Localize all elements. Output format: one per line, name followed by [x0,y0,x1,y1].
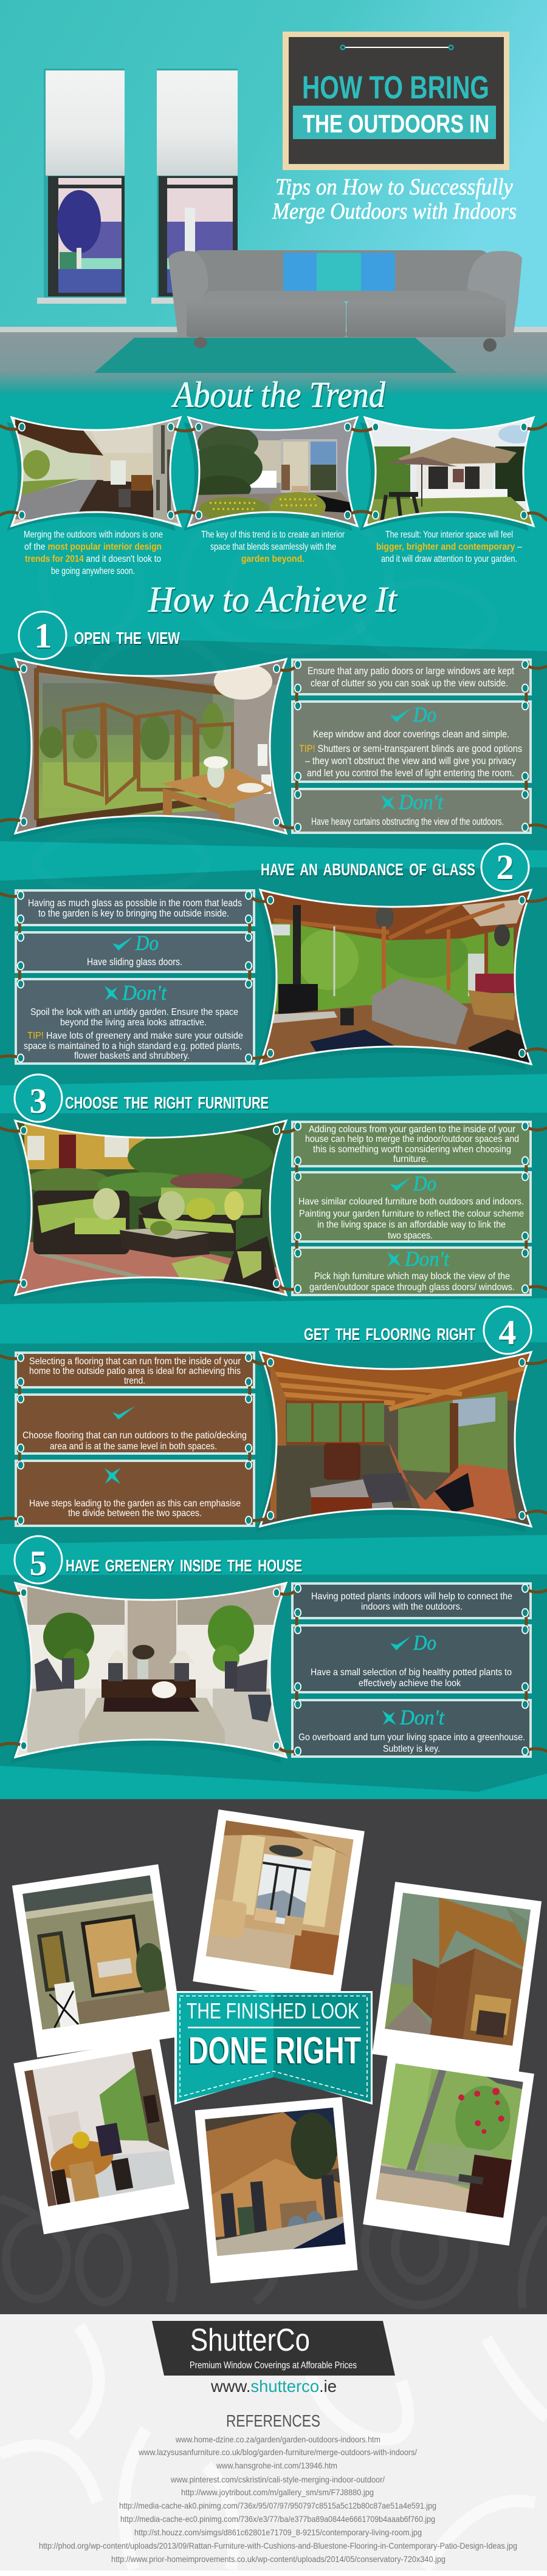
text: about column 2: space that blends seamlessly with the [210,542,336,552]
step 3 intro box: Adding colours from your garden to the inside of your [309,1124,516,1135]
step 2 dont box: beyond the living area looks attractive. [60,1017,207,1028]
step 4 do box: Choose flooring that can run outdoors to the patio/decking [22,1430,247,1441]
references list: www.home-dzine.co.za/garden/garden-outdoors-indoors.htm [175,2434,380,2444]
references list: http://media-cache-ec0.pinimg.com/736x/e3/77/ba/e377ba89a0844e6661709b4aaab6f760.jpg [120,2514,435,2524]
step 4 dont box [16,1461,254,1526]
ropes: step 5 [0,1584,547,1755]
step 2 header: 2 [496,847,514,887]
step 1 dont box [292,789,531,833]
text: about column 1 [24,530,163,576]
references list [39,2434,517,2564]
step 5 do box: Have a small selection of big healthy potted plants to [311,1667,512,1678]
step 4 do box [16,1395,254,1454]
step 4 dont box: the divide between the two spaces. [68,1508,202,1519]
references list: http://www.prior-homeimprovements.co.uk/wp-content/uploads/2014/05/conservatory-720x340.jpg [111,2554,446,2564]
step 4 header [304,1307,531,1354]
photo: glass walled lounge [255,890,531,1070]
step 2 dont box [16,979,254,1064]
text: about column 1: trends for 2014 and it doesn't look to [25,554,161,564]
dont label [105,981,167,1005]
photo: living room with plants [10,1583,286,1763]
shag rug [94,338,457,373]
step 3 header [15,1074,269,1122]
do label [390,1631,436,1655]
step 3 dont box: Pick high furniture which may block the view of the [314,1271,510,1282]
step 3 do box: Have similar coloured furniture both outdoors and indoors. [298,1197,524,1207]
step 3 do box: in the living space is an affordable way to link the [317,1220,506,1230]
step 1 do box [292,702,531,782]
step 4 intro box: home to the outside patio area is ideal for achieving this [29,1366,241,1376]
website address: www.shutterco.ie [210,2377,337,2396]
text: about column 3: bigger, brighter and contemporary – [376,542,522,552]
step 3 dont box: garden/outdoor space through glass doors/ windows. [309,1282,515,1293]
sign string [340,45,453,50]
polaroid: great room [193,1809,365,2003]
step 5 intro box: indoors with the outdoors. [361,1602,463,1612]
text: about column 1: be going anywhere soon. [51,566,135,576]
text: about column 2 [201,530,345,564]
step 5 header: HAVE GREENERY INSIDE THE HOUSE [66,1556,302,1575]
sofa [168,250,522,352]
step 4 intro box: trend. [124,1376,145,1386]
banner line 1: THE FINISHED LOOK [187,1998,359,2023]
title line 1: HOW TO BRING [302,70,489,106]
step 3 do box [292,1172,531,1242]
step 4 dont box: Have steps leading to the garden as this can emphasise [29,1498,241,1509]
photo: green rattan furniture [10,1121,286,1301]
step 2 dont box: flower baskets and shrubbery. [74,1051,190,1061]
step 2 header: HAVE AN ABUNDANCE OF GLASS [261,860,475,879]
dont label [382,1706,445,1729]
step 4 header: GET THE FLOORING RIGHT [304,1325,475,1344]
step 2 intro box [16,890,254,925]
step 1 intro box: clear of clutter so you can soak up the view outside. [311,677,508,689]
photo: timber sunroom [255,1352,531,1532]
step 3 intro box: this is something worth considering when choosing [313,1144,511,1155]
step 2 dont box: TIP! Have lots of greenery and make sure your outside [27,1031,243,1041]
photo: thatched villa [360,417,535,531]
text: about column 2: garden beyond. [241,554,304,564]
step 1 intro box [292,660,531,694]
do label [112,931,159,955]
step 3 dont box [292,1247,531,1295]
step 5 header: 5 [29,1543,47,1583]
subtitle: Merge Outdoors with Indoors [272,199,517,224]
heading: how to achieve it: How to Achieve It [148,579,397,620]
panel: footer [0,2314,547,2576]
step 2 intro box: Having as much glass as possible in the room that leads [28,897,242,909]
step 5 header [15,1536,302,1584]
step 3 intro box: furniture. [393,1154,428,1164]
text: about column 2: The key of this trend is to create an interior [201,530,345,540]
hero room scene [0,0,547,396]
panel: finished look background [0,1799,547,2314]
polaroid: dining room [13,2038,189,2235]
step 3 intro box: house can help to merge the indoor/outdoor spaces and [305,1134,519,1144]
step 2 dont box: Spoil the look with an untidy garden. Ensure the space [30,1007,238,1017]
step 1 do box: and let you control the level of light entering the room. [307,767,514,779]
ropes: step 4 [0,1353,547,1525]
step 5 do box: effectively achieve the look [359,1678,461,1689]
step 1 do box: Keep window and door coverings clean and simple. [313,728,509,740]
text: about column 1: of the most popular interior design [24,542,162,552]
references list: http://www.joytribout.com/m/gallery_sm/sm/F7J8880.jpg [181,2487,374,2497]
window: left [37,69,126,304]
step 2 dont box: space is maintained to a high standard e.g. potted plants, [24,1041,242,1051]
photo: glass doors and pine [184,417,359,531]
step 5 dont box: Subtlety is key. [383,1744,440,1754]
shutterco logo [152,2321,395,2376]
teal background with bands [0,395,547,1799]
do label [390,703,436,726]
step 5 intro box: Having potted plants indoors will help to connect the [311,1591,512,1602]
ribbon banner [174,1991,373,2105]
references list: www.hansgrohe-int.com/13946.htm [216,2461,337,2470]
step 2 do box: Have sliding glass doors. [87,956,182,968]
do label [390,1172,436,1195]
references list: http://media-cache-ak0.pinimg.com/736x/95/07/97/950797c8515a5c12b80c87ae51a4e591.jpg [119,2501,436,2510]
subtitle [272,174,517,224]
references list: www.lazysusanfurniture.co.uk/blog/garden-furniture/merge-outdoors-with-indoors/ [138,2447,417,2457]
step 1 header [19,612,180,659]
step 2 intro box: to the garden is key to bringing the outside inside. [38,907,229,919]
polaroid: house exterior [12,1864,184,2057]
photo: bifold doors [10,659,286,839]
shutterco logo: ShutterCo [190,2323,310,2358]
step 5 dont box [292,1700,531,1757]
ropes: step 1 [0,660,547,832]
dont label [381,790,444,814]
subtitle: Tips on How to Successfully [275,174,513,200]
photo: open plan patio [7,417,181,531]
step 1 header: OPEN THE VIEW [74,629,180,647]
references list: http://st.houzz.com/simgs/d861c62801e71709_8-9215/contemporary-living-room.jpg [134,2527,422,2537]
step 4 intro box [16,1353,254,1387]
step 4 intro box: Selecting a flooring that can run from the inside of your [29,1356,241,1367]
step 4 do box: area and is at the same level in both spaces. [50,1441,217,1452]
heading: about the trend: About the Trend [171,375,386,415]
step 5 do box [292,1625,531,1692]
title band [293,106,496,139]
title line 2: THE OUTDOORS IN [303,109,489,138]
step 1 header: 1 [34,616,52,655]
step 2 do box [16,931,254,972]
shutterco logo: Premium Window Coverings at Afforable Prices [190,2360,357,2371]
step 3 header: CHOOSE THE RIGHT FURNITURE [65,1093,269,1112]
ropes: step 3 [0,1121,547,1294]
step 5 dont box: Go overboard and turn your living space into a greenhouse. [298,1732,525,1743]
dont label [387,1247,450,1271]
cross icon [105,1468,120,1484]
step 3 intro box [292,1122,531,1166]
references list: www.pinterest.com/cskristin/cali-style-merging-indoor-outdoor/ [170,2475,385,2484]
check icon [112,1406,135,1420]
banner line 2: DONE RIGHT [188,2030,361,2072]
ropes: step 2 [0,890,547,1063]
polaroid: outdoor lounge [195,2097,358,2283]
polaroid: rose garden view [363,2052,534,2246]
text: about column 3 [376,530,522,564]
chalkboard title sign [283,32,509,170]
text: about column 1: Merging the outdoors with indoors is one [24,530,163,540]
ropes: about photos [0,423,547,520]
step 4 header: 4 [498,1313,517,1352]
step 3 do box: Painting your garden furniture to reflect the colour scheme [299,1209,524,1219]
step 3 header: 3 [29,1081,47,1121]
references heading: REFERENCES [226,2411,320,2430]
window: right [151,69,238,304]
polaroid: timber pavilion [372,1882,542,2074]
step 5 intro box [292,1584,531,1618]
step 2 header [261,844,529,891]
text: about column 3: The result: Your interior space will feel [385,530,513,540]
step 3 do box: two spaces. [388,1231,433,1241]
